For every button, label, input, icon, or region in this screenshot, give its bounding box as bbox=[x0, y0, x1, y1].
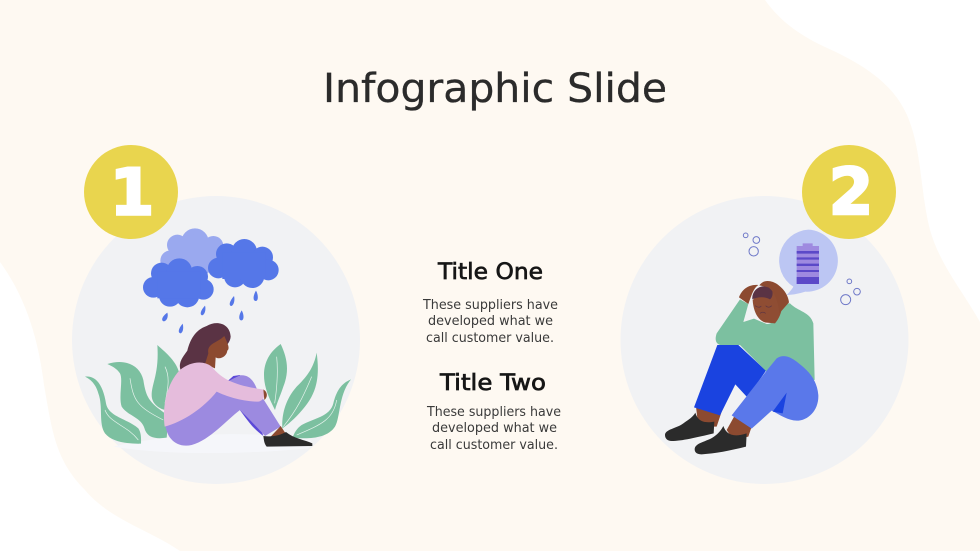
text block one: These suppliers have bbox=[422, 297, 558, 313]
badge one: 1 bbox=[110, 156, 154, 230]
text block two bbox=[426, 370, 561, 453]
hand bbox=[263, 389, 267, 400]
text block two: Title Two bbox=[439, 370, 546, 396]
icon: rain drops bbox=[162, 291, 258, 333]
text block two: developed what we bbox=[432, 420, 557, 436]
shin shadow bbox=[773, 393, 787, 413]
panel: illustration two bbox=[620, 196, 908, 484]
badge one bbox=[84, 145, 178, 239]
hands bbox=[739, 281, 789, 313]
leaves bbox=[85, 344, 351, 444]
ground shadow bbox=[113, 434, 312, 453]
badge two: 2 bbox=[829, 156, 873, 230]
sweater bbox=[716, 299, 815, 380]
hair bbox=[180, 323, 231, 372]
pants bbox=[165, 375, 281, 446]
text block two: call customer value. bbox=[430, 437, 558, 453]
text block two: These suppliers have bbox=[426, 404, 561, 420]
title: Infographic Slide bbox=[323, 66, 667, 112]
front leg bbox=[732, 356, 818, 429]
icon: back cloud bbox=[160, 228, 223, 279]
woman under rain clouds illustration bbox=[85, 228, 351, 453]
icon: front cloud left bbox=[143, 258, 214, 307]
panel: illustration one bbox=[72, 196, 360, 484]
foot bbox=[270, 426, 286, 437]
badge two bbox=[802, 145, 896, 239]
shoe bbox=[263, 432, 312, 447]
shoes bbox=[665, 413, 714, 441]
text block one bbox=[422, 259, 558, 346]
ankles bbox=[696, 407, 752, 440]
hair bbox=[752, 286, 773, 299]
text block one: Title One bbox=[437, 259, 543, 285]
backdrop circle two bbox=[620, 196, 908, 484]
text block one: developed what we bbox=[428, 313, 553, 329]
icon: front cloud right bbox=[208, 239, 279, 288]
back leg bbox=[694, 345, 766, 415]
tired man with low battery illustration bbox=[665, 230, 860, 454]
thought bubbles bbox=[743, 233, 860, 305]
text block one: call customer value. bbox=[426, 330, 554, 346]
face details bbox=[755, 306, 772, 313]
speech bubble bbox=[779, 230, 838, 295]
backdrop circle one bbox=[72, 196, 360, 484]
leaf veins bbox=[105, 357, 337, 440]
sweater bbox=[164, 363, 264, 427]
icon: battery bbox=[797, 243, 819, 284]
face bbox=[205, 336, 229, 368]
inner leg bbox=[202, 375, 263, 436]
head bbox=[753, 283, 782, 323]
